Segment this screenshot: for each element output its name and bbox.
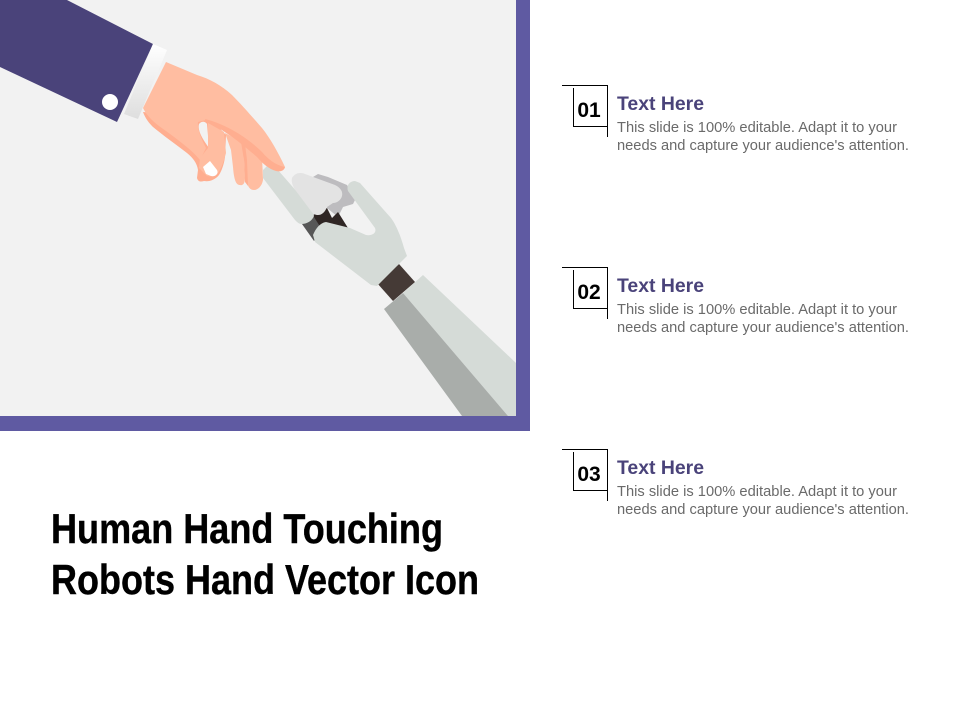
forearm light side [403,275,516,416]
forearm dark side [384,293,508,416]
palm and thumb [313,181,407,286]
description 03: This slide is 100% editable. Adapt it to your [617,484,897,500]
pointing finger [263,165,314,224]
title: Robots Hand Vector Icon [51,556,479,603]
illustration panel with purple frame [0,0,530,431]
number badge 01: 01 [577,99,601,122]
number badge 01 [562,86,608,137]
description 03: needs and capture your audience's attention. [617,502,909,518]
description 02: needs and capture your audience's attention. [617,320,909,336]
title: Human Hand Touching [51,505,443,552]
heading 02: Text Here [617,276,704,297]
description 01: needs and capture your audience's attention. [617,138,909,154]
fingernail [203,161,218,176]
hand back and index finger [143,62,285,170]
item 03 [562,450,909,518]
index joint [302,214,321,241]
hand shadow shape [143,112,226,182]
shirt cuff [124,44,167,119]
icon: human arm and hand [0,0,285,190]
number badge 02: 02 [577,281,601,304]
description 01 [617,120,909,154]
finger separator shadow [241,142,248,186]
back fingers [313,174,355,217]
front curled fingers [292,173,342,215]
bent finger [199,123,226,176]
cuff button [102,94,118,110]
index finger underside shadow [205,119,285,171]
item 02 [562,268,909,336]
number badge 03: 03 [577,463,601,486]
lowest finger [244,142,263,190]
dark knuckle [313,208,348,232]
icon: robot arm and hand [263,165,516,416]
item 01 [562,86,909,154]
jacket sleeve [0,0,153,122]
title [51,505,479,603]
description 01: This slide is 100% editable. Adapt it to your [617,120,897,136]
description 02: This slide is 100% editable. Adapt it to your [617,302,897,318]
gap between thumb and finger [199,122,209,148]
number badge 03 [562,450,608,501]
description 02 [617,302,909,336]
second finger [225,133,245,185]
heading 03: Text Here [617,458,704,479]
heading 01: Text Here [617,94,704,115]
wrist joint [377,264,415,301]
number badge 02 [562,268,608,319]
description 03 [617,484,909,518]
